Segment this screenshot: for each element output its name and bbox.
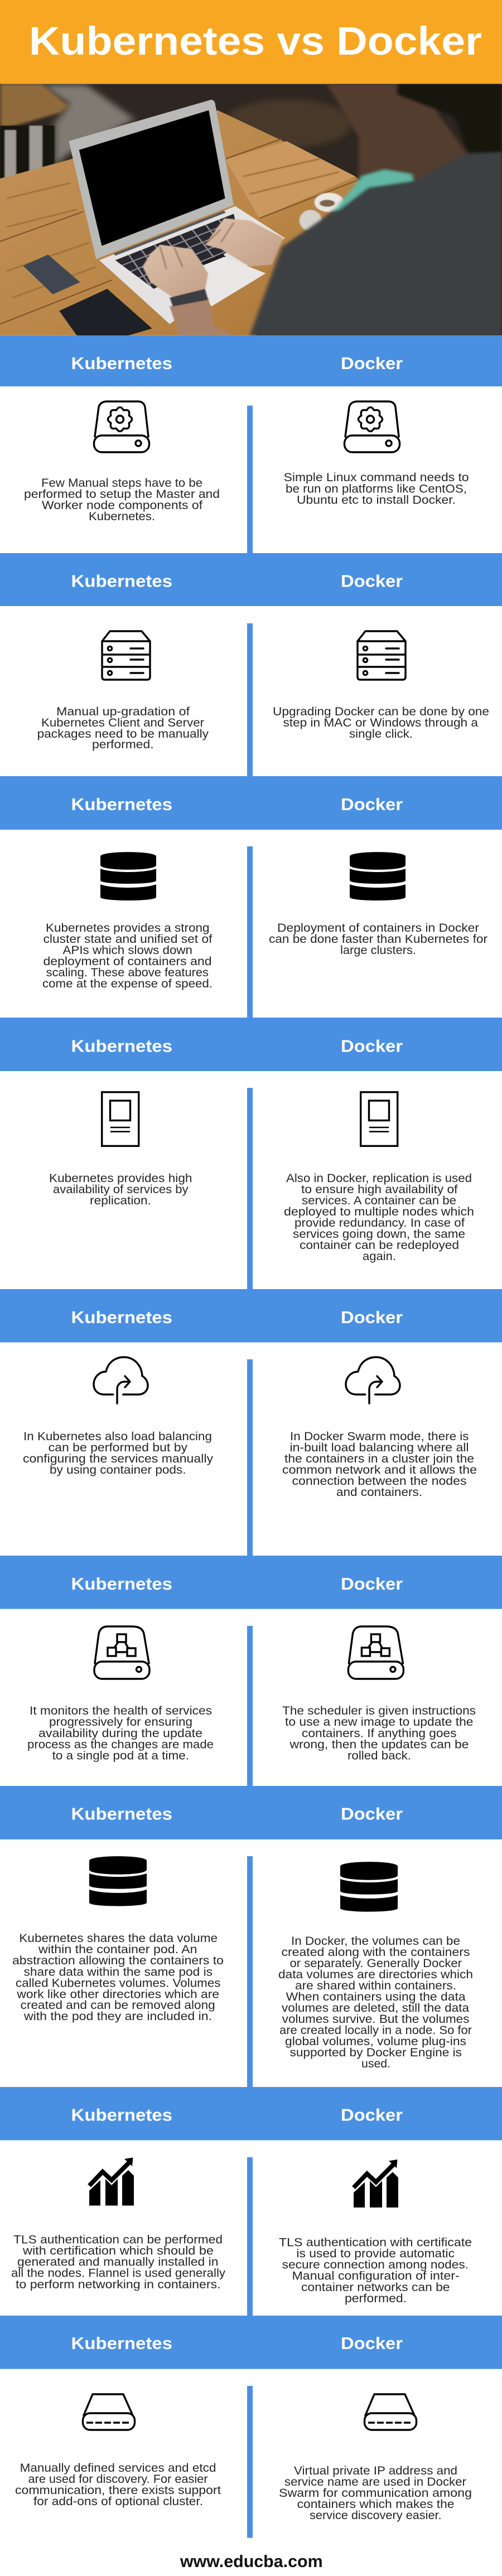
Kubernetes text: with the pod they are included in.: [23, 2010, 212, 2023]
Kubernetes text: work like other directories which are: [16, 1988, 219, 2001]
Docker text: Virtual private IP address and: [294, 2464, 457, 2477]
header band: [0, 336, 502, 386]
row 4: availability: [0, 1018, 502, 1289]
Docker text: containers which makes the: [297, 2498, 454, 2511]
header band: Kubernetes: [71, 1574, 172, 1594]
Docker text: again.: [363, 1250, 396, 1263]
header band: [0, 553, 502, 606]
Docker text: created along with the containers: [281, 1946, 470, 1959]
title: Kubernetes vs Docker: [29, 20, 482, 64]
Kubernetes text: called Kubernetes volumes. Volumes: [16, 1977, 221, 1989]
Docker text: supported by Docker Engine is: [290, 2046, 462, 2059]
Docker text: are created locally in a node. So for: [279, 2024, 472, 2037]
header band: Kubernetes: [71, 2105, 172, 2125]
icon: database: [89, 1856, 147, 1906]
Docker text: in-built load balancing where all: [290, 1441, 469, 1454]
Kubernetes text: [37, 705, 209, 751]
Docker text: to use a new image to update the: [285, 1716, 473, 1728]
row 9: service discovery: [0, 2316, 502, 2538]
Kubernetes text: In Kubernetes also load balancing: [23, 1430, 212, 1443]
Docker text: Also in Docker, replication is used: [286, 1172, 472, 1185]
row 8: networking: [0, 2087, 502, 2316]
header band: [0, 2087, 502, 2140]
Docker text: [273, 705, 489, 740]
row 7: data volumes: [0, 1786, 502, 2087]
Kubernetes text: Kubernetes.: [89, 510, 155, 523]
Docker text: wrong, then the updates can be: [289, 1739, 469, 1751]
Kubernetes text: Worker node components of: [42, 499, 202, 512]
Docker text: connection between the nodes: [292, 1475, 466, 1488]
Kubernetes text: [12, 1932, 224, 2023]
divider: [247, 623, 253, 776]
Docker text: and containers.: [336, 1486, 422, 1499]
header band: Kubernetes: [71, 795, 172, 814]
Docker text: service discovery easier.: [310, 2509, 442, 2522]
title banner: [0, 0, 502, 84]
icon: slim drive: [365, 2394, 416, 2430]
Kubernetes text: process as the changes are made: [27, 1739, 214, 1751]
divider: [247, 1856, 253, 2087]
divider: [247, 406, 253, 553]
Docker text: the containers in a cluster join the: [284, 1452, 474, 1465]
Docker text: data volumes are directories which: [278, 1968, 473, 1981]
Docker text: rolled back.: [347, 1750, 411, 1762]
Docker text: [284, 471, 469, 506]
icon: growth chart: [89, 2158, 134, 2206]
Kubernetes text: [49, 1172, 192, 1207]
header band: Kubernetes: [71, 1308, 172, 1327]
Kubernetes text: for add-ons of optional cluster.: [33, 2495, 203, 2508]
Docker text: Manual configuration of inter-: [292, 2270, 460, 2283]
Kubernetes text: packages need to be manually: [37, 728, 209, 740]
icon: document: [361, 1092, 398, 1146]
header band: Docker: [341, 1036, 403, 1056]
Docker text: TLS authentication with certificate: [279, 2236, 472, 2249]
Kubernetes text: Few Manual steps have to be: [41, 477, 202, 490]
Kubernetes text: progressively for ensuring: [49, 1716, 192, 1728]
Docker text: performed.: [345, 2292, 407, 2305]
icon: cloud upload: [346, 1357, 400, 1403]
Docker text: used.: [361, 2057, 390, 2070]
divider: [247, 2386, 253, 2538]
Docker text: deployed to multiple nodes which: [284, 1205, 474, 1218]
hands: [142, 218, 283, 336]
divider: [247, 1088, 253, 1289]
Kubernetes text: within the container pod. An: [38, 1943, 197, 1956]
Docker text: [282, 1430, 477, 1499]
phone and notebook: [23, 255, 80, 294]
laptop: [69, 100, 234, 259]
header band: [0, 776, 502, 830]
Docker text: single click.: [349, 728, 413, 740]
icon: slim drive: [83, 2394, 135, 2430]
Kubernetes text: Kubernetes provides high: [49, 1172, 192, 1185]
Kubernetes text: abstraction allowing the containers to: [12, 1954, 224, 1967]
Kubernetes text: configuring the services manually: [23, 1452, 214, 1465]
Kubernetes text: Kubernetes Client and Server: [41, 716, 204, 729]
Docker text: container networks can be: [301, 2281, 450, 2294]
Kubernetes text: [27, 1705, 214, 1762]
Kubernetes text: all the nodes. Flannel is used generally: [11, 2267, 226, 2280]
header band: [0, 1556, 502, 1609]
Docker text: provide redundancy. In case of: [295, 1217, 465, 1229]
header band: [0, 1786, 502, 1839]
header band: Docker: [341, 2105, 403, 2125]
Docker text: large clusters.: [340, 944, 416, 957]
Kubernetes text: Manual up-gradation of: [56, 705, 190, 718]
divider: [247, 1626, 253, 1786]
Docker text: The scheduler is given instructions: [282, 1705, 476, 1717]
header band: Kubernetes: [71, 1804, 172, 1824]
Kubernetes text: [24, 477, 220, 523]
Docker text: In Docker, the volumes can be: [291, 1935, 460, 1948]
Kubernetes text: are used for discovery. For easier: [28, 2473, 207, 2486]
Docker text: container can be redeployed: [300, 1239, 459, 1252]
Kubernetes text: availability of services by: [53, 1183, 189, 1196]
icon: database: [350, 852, 406, 900]
row 1: setup: [0, 336, 502, 553]
Kubernetes text: [15, 2462, 221, 2508]
Kubernetes text: [42, 922, 213, 990]
Docker text: services. A container can be: [302, 1194, 456, 1207]
Docker text: are shared within containers.: [295, 1979, 456, 1992]
row 6: rolling updates: [0, 1556, 502, 1786]
header band: Kubernetes: [71, 1036, 172, 1056]
Kubernetes text: It monitors the health of services: [30, 1705, 212, 1717]
Docker text: is used to provide automatic: [297, 2248, 455, 2260]
icon: network drive: [94, 1626, 149, 1679]
Docker text: [284, 1172, 474, 1263]
header band: [0, 2316, 502, 2369]
header band: Kubernetes: [71, 571, 172, 591]
Docker text: Deployment of containers in Docker: [277, 922, 479, 934]
Kubernetes text: deployment of containers and: [44, 955, 212, 968]
Docker text: Simple Linux command needs to: [284, 471, 469, 484]
divider: [247, 846, 253, 1018]
header band: Docker: [341, 1804, 403, 1824]
icon: document: [102, 1092, 139, 1146]
Docker text: [282, 1705, 476, 1762]
header band: Docker: [341, 354, 403, 373]
Kubernetes text: performed.: [92, 738, 154, 751]
Kubernetes text: communication, there exists support: [15, 2484, 221, 2497]
Docker text: containers. If anything goes: [302, 1727, 456, 1740]
person: [250, 84, 502, 336]
Kubernetes text: Kubernetes provides a strong: [46, 922, 210, 934]
Kubernetes text: share data within the same pod is: [23, 1966, 213, 1978]
icon: growth chart: [354, 2159, 398, 2207]
Docker text: to ensure high availability of: [301, 1183, 458, 1196]
Docker text: global volumes, volume plug-ins: [285, 2035, 466, 2048]
Kubernetes text: TLS authentication can be performed: [13, 2234, 223, 2246]
Kubernetes text: scaling. These above features: [46, 966, 209, 979]
header band: Docker: [341, 1308, 403, 1327]
Kubernetes text: [11, 2234, 226, 2291]
Kubernetes text: come at the expense of speed.: [42, 977, 213, 990]
header band: Docker: [341, 571, 403, 591]
Kubernetes text: replication.: [90, 1194, 151, 1207]
icon: database: [100, 852, 156, 900]
row 2: upgrade: [0, 553, 502, 776]
header band: Docker: [341, 2333, 403, 2353]
Docker text: [279, 2464, 472, 2522]
Docker text: services going down, the same: [293, 1228, 465, 1241]
Docker text: volumes are deleted, still the data: [282, 2002, 469, 2015]
Kubernetes text: availability during the update: [38, 1727, 202, 1740]
icon: cloud upload: [94, 1357, 148, 1403]
Kubernetes text: can be performed but by: [49, 1441, 188, 1454]
Docker text: Upgrading Docker can be done by one: [273, 705, 489, 718]
Docker text: secure connection among nodes.: [282, 2259, 469, 2272]
Docker text: volumes survive. But the volumes: [282, 2013, 470, 2026]
Kubernetes text: to perform networking in containers.: [16, 2278, 221, 2291]
photo: person typing on laptop at wooden table: [0, 84, 502, 336]
Docker text: common network and it allows the: [282, 1464, 477, 1476]
icon: network drive: [348, 1626, 403, 1679]
Docker text: be run on platforms like CentOS,: [286, 483, 467, 495]
Kubernetes text: by using container pods.: [50, 1464, 186, 1476]
Kubernetes text: with certification which should be: [22, 2245, 214, 2258]
Docker text: [269, 922, 487, 957]
Docker text: [278, 1935, 473, 2070]
Kubernetes text: Manually defined services and etcd: [20, 2462, 216, 2475]
icon: gear drive: [345, 401, 399, 452]
Kubernetes text: cluster state and unified set of: [44, 933, 213, 946]
header band: [0, 1018, 502, 1071]
header band: Docker: [341, 795, 403, 814]
Docker text: When containers using the data: [286, 1991, 466, 2003]
Docker text: Swarm for communication among: [279, 2487, 472, 2500]
coffee cup: [300, 193, 344, 231]
divider: [247, 2157, 253, 2316]
icon: server: [102, 631, 150, 680]
Docker text: can be done faster than Kubernetes for: [269, 933, 487, 946]
Docker text: [279, 2236, 472, 2305]
Kubernetes text: generated and manually installed in: [17, 2256, 219, 2269]
Docker text: Ubuntu etc to install Docker.: [297, 494, 456, 506]
Docker text: service name are used in Docker: [284, 2476, 466, 2488]
Kubernetes text: to a single pod at a time.: [52, 1750, 189, 1762]
icon: server: [358, 631, 406, 680]
icon: gear drive: [94, 401, 149, 452]
Docker text: or separately. Generally Docker: [290, 1957, 462, 1970]
header band: Kubernetes: [71, 2333, 172, 2353]
Kubernetes text: performed to setup the Master and: [24, 488, 220, 501]
row 5: load balancing: [0, 1289, 502, 1556]
icon: database: [340, 1862, 398, 1912]
header band: Kubernetes: [71, 354, 172, 373]
footer: website: www.educba.com: [180, 2551, 323, 2571]
Kubernetes text: created and can be removed along: [21, 1999, 215, 2012]
row 3: deployment: [0, 776, 502, 1018]
Kubernetes text: [23, 1430, 214, 1476]
header band: [0, 1289, 502, 1343]
Docker text: In Docker Swarm mode, there is: [290, 1430, 469, 1443]
Kubernetes text: Kubernetes shares the data volume: [19, 1932, 218, 1945]
divider: [247, 1359, 253, 1556]
Kubernetes text: APIs which slows down: [62, 944, 192, 957]
header band: Docker: [341, 1574, 403, 1594]
Docker text: step in MAC or Windows through a: [283, 716, 478, 729]
